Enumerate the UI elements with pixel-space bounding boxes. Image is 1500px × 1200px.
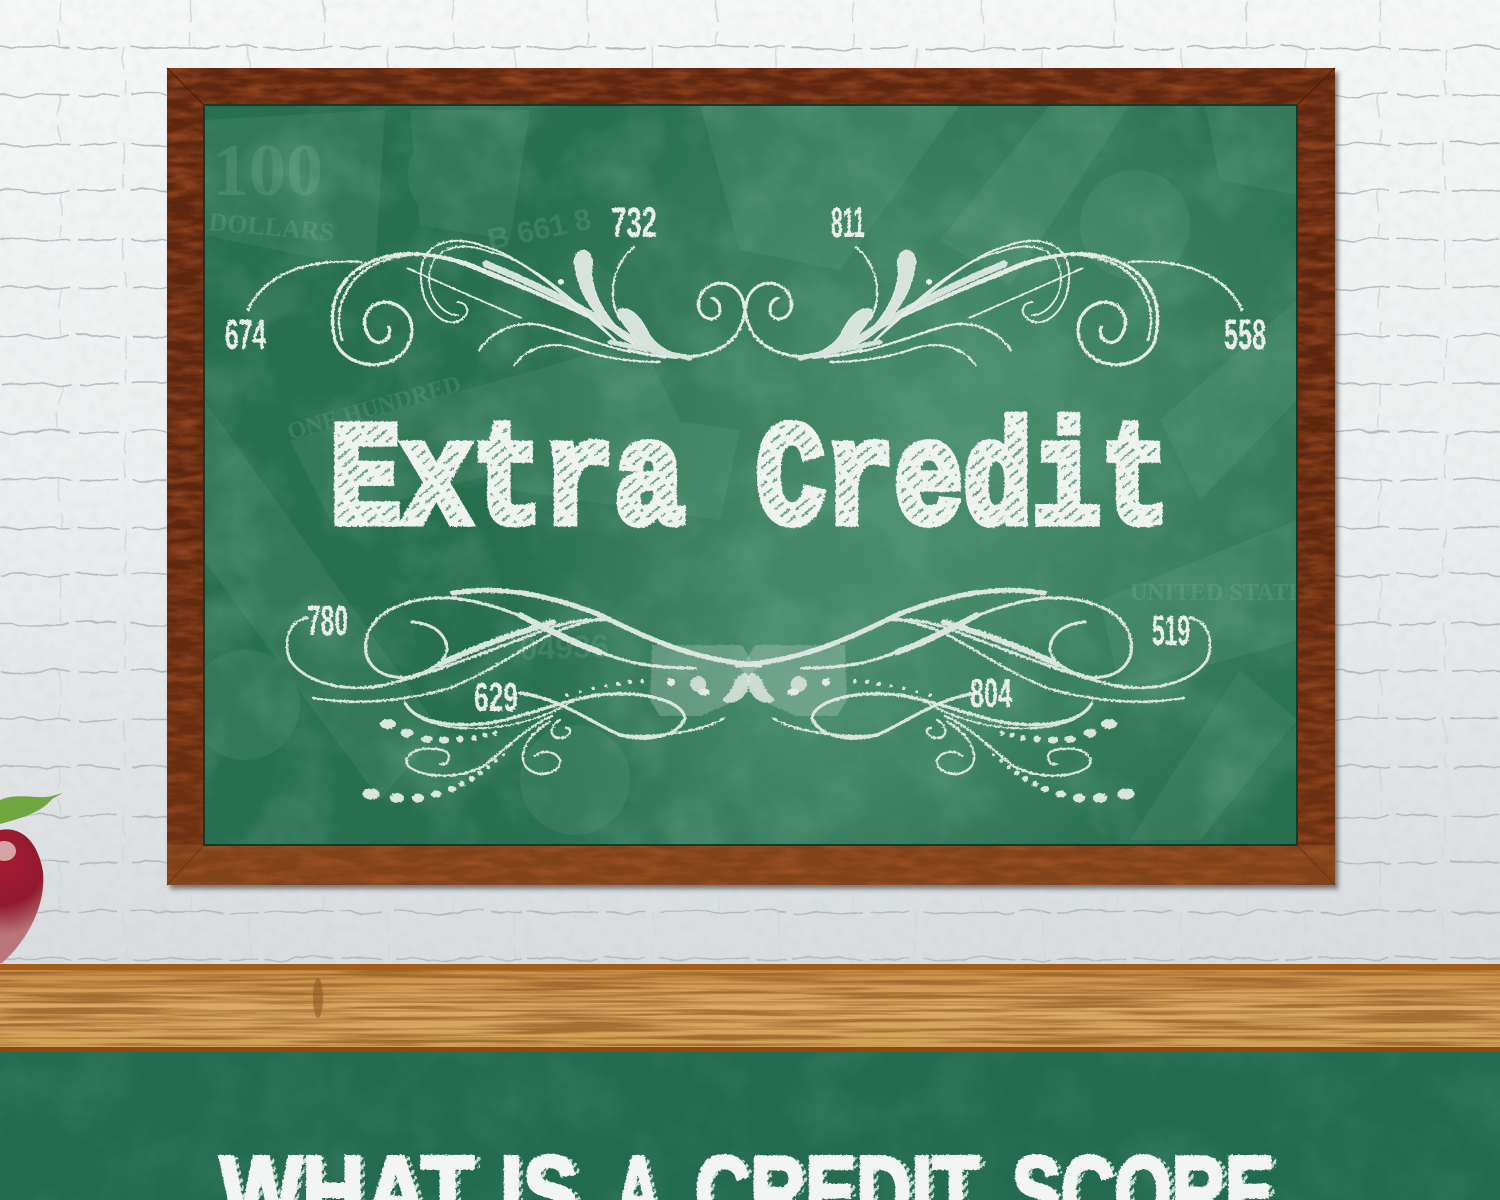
chalk score numbers: 780 (307, 597, 348, 645)
lower chalkboard section (0, 1052, 1500, 1200)
chalk score numbers: 629 (474, 674, 518, 720)
heading hatched shadow (225, 1136, 1281, 1200)
faint bill lettering: DOLLARS (207, 207, 335, 247)
faint bill lettering: 100 (212, 130, 323, 212)
heading text (220, 1136, 1274, 1200)
chalk score numbers: 558 (1224, 311, 1266, 359)
green board surface (190, 105, 1318, 845)
chalk score numbers (225, 199, 1266, 720)
faint bill lettering: B 661 8 (485, 203, 594, 257)
wooden frame (167, 68, 1335, 885)
top chalk flourish, right half (746, 241, 1242, 365)
chalkboard with wooden frame (167, 68, 1335, 885)
bottom chalk flourish, left half (287, 590, 760, 803)
chalk score numbers: 519 (1152, 607, 1190, 655)
headline: Extra Credit: Credit (756, 400, 1170, 566)
faint bill lettering: UNITED STATES (1130, 580, 1318, 606)
top chalk flourish, left half (248, 241, 744, 365)
chalk score numbers: 804 (970, 670, 1012, 716)
faint bill lettering: 04936 (519, 628, 609, 667)
chalk score numbers: 674 (225, 311, 266, 359)
faint bill lettering: ONE HUNDRED (284, 371, 464, 446)
wooden ledge (0, 964, 1500, 1052)
faint bill lettering (207, 130, 1318, 667)
icon: red apple (0, 793, 63, 963)
headline: Extra Credit (330, 400, 1170, 566)
chalk score numbers: 811 (831, 199, 865, 247)
bottom chalk flourish, right half (737, 590, 1210, 803)
section heading (220, 1136, 1281, 1200)
headline: Extra Credit: Extra (330, 400, 685, 566)
faint dollar bill collage (190, 105, 1297, 840)
chalk score numbers: 732 (611, 199, 657, 247)
